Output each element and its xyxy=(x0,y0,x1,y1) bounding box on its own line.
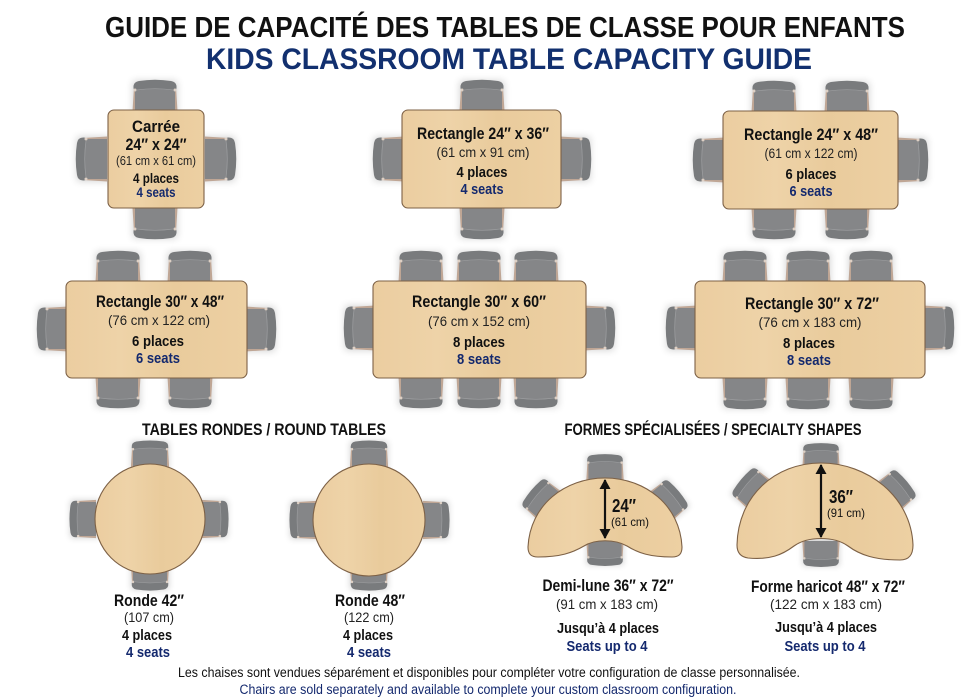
panel: half-moon table xyxy=(519,454,691,655)
panel: rectangle 24 x 36 xyxy=(373,80,591,239)
panel: square table 24 x 24: 24″ x 24″ xyxy=(126,135,186,154)
panel: half-moon table: 24″ xyxy=(612,496,636,516)
panel: bean table: (91 cm) xyxy=(827,506,865,520)
panel: round table 48: Ronde 48″ xyxy=(335,591,405,610)
panel: round table 42: Ronde 42″ xyxy=(114,591,184,610)
panel: square table 24 x 24: 4 places xyxy=(133,170,179,186)
panel: bean table: (122 cm x 183 cm) xyxy=(770,596,882,612)
panel: round table 42: (107 cm) xyxy=(124,609,174,625)
panel: half-moon table: Jusqu’à 4 places xyxy=(557,620,659,637)
panel: square table 24 x 24: Carrée xyxy=(132,117,180,136)
panel: half-moon table: Seats up to 4 xyxy=(566,638,648,655)
panel: half-moon table: Demi-lune 36″ x 72″ xyxy=(542,576,674,595)
panel: round table 48: (122 cm) xyxy=(344,609,394,625)
panel: rectangle 30 x 60: Rectangle 30″ x 60″ xyxy=(412,292,546,311)
panel: rectangle 24 x 48: 6 places xyxy=(786,166,836,183)
panel: bean table xyxy=(729,443,919,655)
panel: rectangle 30 x 72: 8 seats xyxy=(787,352,831,369)
panel: square table 24 x 24: 4 seats xyxy=(136,184,176,200)
panel: rectangle 24 x 36: 4 seats xyxy=(460,181,504,198)
panel: round table 42: 4 places xyxy=(122,627,172,644)
heading: specialty shapes: FORMES SPÉCIALISÉES / SPECIALTY SHAPES xyxy=(564,420,862,439)
panel: half-moon table: (91 cm x 183 cm) xyxy=(556,596,658,612)
heading: round tables: TABLES RONDES / ROUND TABLES xyxy=(142,421,386,439)
title: English: KIDS CLASSROOM TABLE CAPACITY GUIDE xyxy=(206,43,812,76)
panel: rectangle 30 x 60: 8 seats xyxy=(457,351,501,368)
panel: half-moon table: (61 cm) xyxy=(611,515,649,529)
panel: bean table: Seats up to 4 xyxy=(784,638,866,655)
panel: rectangle 30 x 48: Rectangle 30″ x 48″ xyxy=(96,292,224,311)
panel: bean table: Forme haricot 48″ x 72″ xyxy=(751,577,905,596)
arrow: depth 36 xyxy=(820,465,822,537)
panel: rectangle 30 x 72: 8 places xyxy=(783,335,835,352)
title: French: GUIDE DE CAPACITÉ DES TABLES DE CLASSE POUR ENFANTS xyxy=(105,10,905,44)
footer note: French: Les chaises sont vendues séparément et disponibles pour compléter votre configuration de classe personnalisée. xyxy=(178,665,800,680)
panel: round table 48: 4 seats xyxy=(347,644,391,661)
panel: bean table: Jusqu’à 4 places xyxy=(775,619,877,636)
arrow: depth 24 xyxy=(604,480,606,538)
panel: rectangle 24 x 48: Rectangle 24″ x 48″ xyxy=(744,125,878,144)
panel: rectangle 30 x 48: 6 seats xyxy=(136,350,180,367)
panel: rectangle 24 x 48 xyxy=(693,81,928,239)
panel: round table 48 xyxy=(289,440,450,661)
panel: rectangle 30 x 48: (76 cm x 122 cm) xyxy=(108,312,210,328)
panel: bean table: 36″ xyxy=(829,487,853,507)
panel: round table 48: 4 places xyxy=(343,627,393,644)
panel: rectangle 24 x 36: (61 cm x 91 cm) xyxy=(436,144,530,160)
panel: rectangle 30 x 48 xyxy=(37,251,276,408)
panel: square table 24 x 24: (61 cm x 61 cm) xyxy=(116,154,196,168)
panel: rectangle 30 x 72: (76 cm x 183 cm) xyxy=(758,314,862,330)
panel: rectangle 24 x 48: 6 seats xyxy=(790,183,832,200)
panel: rectangle 24 x 36: 4 places xyxy=(456,164,508,181)
panel: rectangle 30 x 60: (76 cm x 152 cm) xyxy=(428,313,530,329)
panel: rectangle 30 x 60 xyxy=(344,251,615,408)
panel: square table 24 x 24 xyxy=(76,80,236,239)
footer note: English: Chairs are sold separately and available to complete your custom classroom configuration. xyxy=(240,682,736,697)
panel: rectangle 24 x 36: Rectangle 24″ x 36″ xyxy=(417,124,549,143)
panel: rectangle 30 x 72 xyxy=(666,251,954,409)
panel: rectangle 30 x 48: 6 places xyxy=(132,333,184,350)
panel: rectangle 24 x 48: (61 cm x 122 cm) xyxy=(764,145,858,161)
panel: round table 42 xyxy=(69,440,229,661)
panel: rectangle 30 x 72: Rectangle 30″ x 72″ xyxy=(745,294,879,313)
panel: rectangle 30 x 60: 8 places xyxy=(453,334,505,351)
panel: round table 42: 4 seats xyxy=(126,644,170,661)
